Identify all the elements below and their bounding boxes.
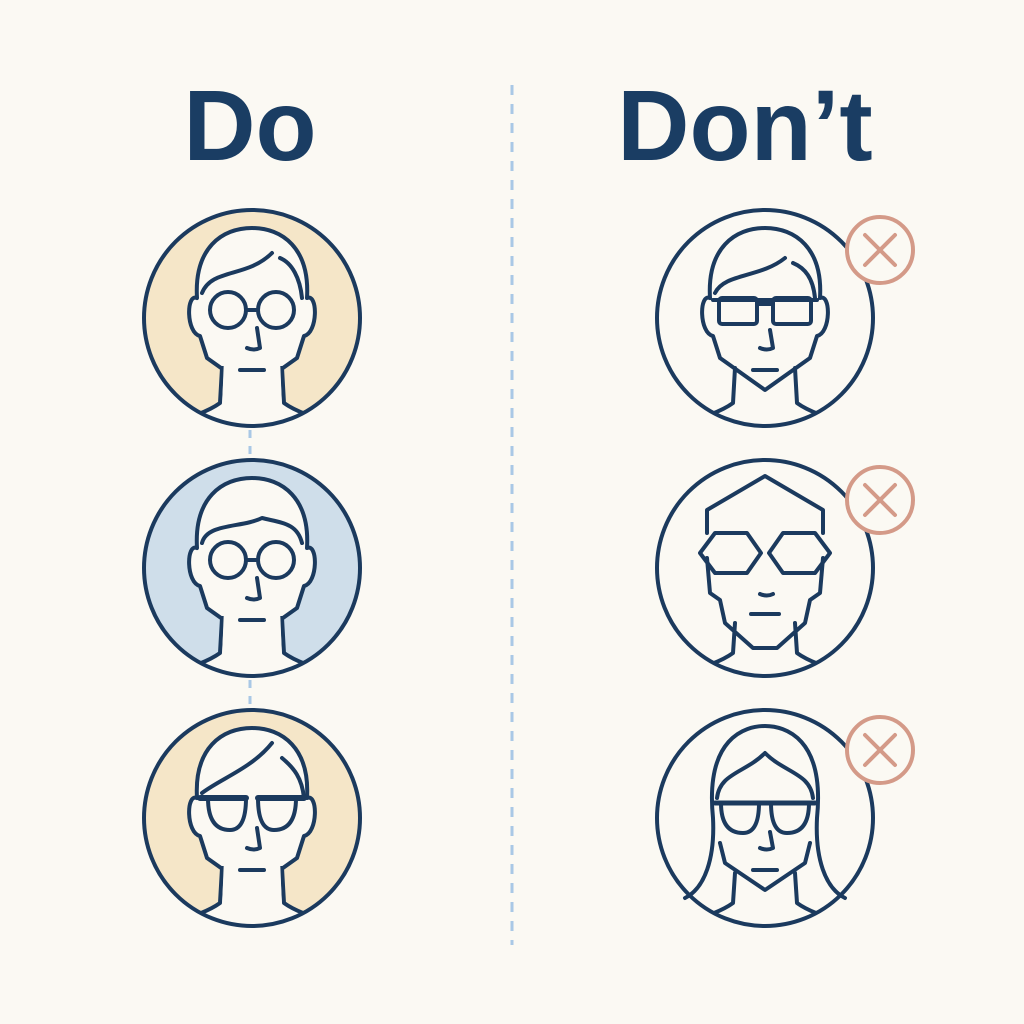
icon: x badge 2	[847, 467, 913, 533]
portrait: don't 3 long hair	[657, 710, 873, 926]
portrait: do 2 round glasses	[144, 460, 360, 708]
portrait: do 1 round glasses	[144, 210, 360, 458]
title: Don't: Don’t	[617, 70, 873, 182]
icon: x badge 3	[847, 717, 913, 783]
title: Do: Do	[183, 70, 317, 182]
icon: x badge 1	[847, 217, 913, 283]
portrait: don't 1 rectangular glasses	[657, 210, 873, 426]
portrait: do 3 cat-eye glasses	[144, 710, 360, 958]
portrait: don't 2 hexagonal glasses	[657, 460, 873, 676]
connector dashes	[248, 430, 252, 708]
divider line	[510, 85, 514, 945]
